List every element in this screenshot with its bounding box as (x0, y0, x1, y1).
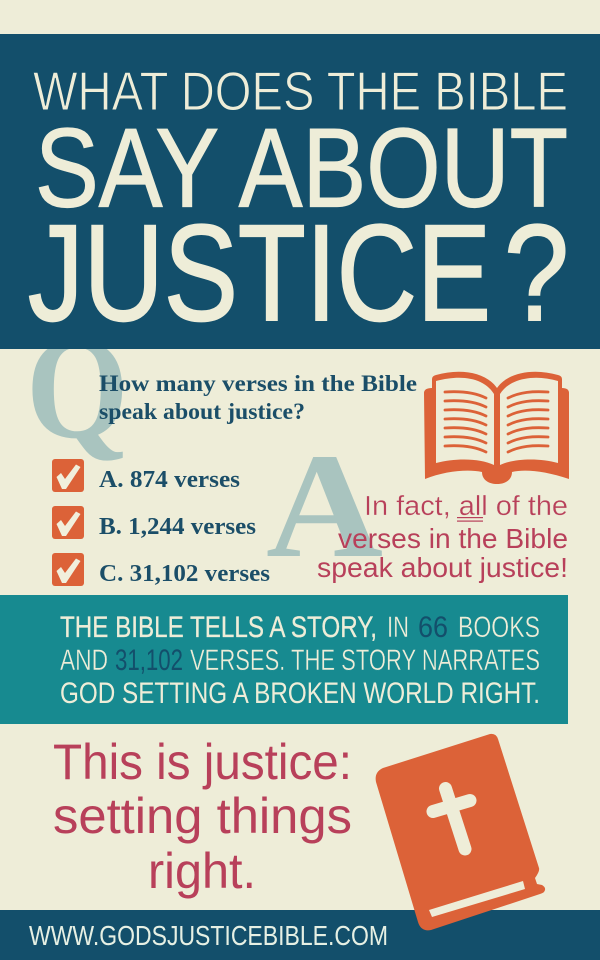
story line 2 (60, 644, 540, 677)
letter Q watermark: Q (26, 308, 129, 470)
story banner (0, 595, 568, 724)
justice statement: setting things (53, 788, 352, 844)
story line 1: 66 (418, 611, 448, 644)
title banner (0, 34, 600, 350)
story line 2: AND (60, 644, 108, 677)
icon: open book (424, 372, 569, 484)
question text (99, 371, 417, 424)
icon: closed bible with cross (376, 734, 545, 930)
answer text: In fact, all of the (364, 490, 568, 521)
title: question mark: ? (504, 197, 569, 350)
answer option B: B. 1,244 verses (99, 514, 256, 540)
answer text: verses in the Bible (338, 523, 568, 554)
question text: speak about justice? (99, 399, 305, 424)
answer text: speak about justice! (317, 552, 568, 583)
answer option A: A. 874 verses (99, 467, 240, 493)
answer option C (52, 553, 270, 587)
story line 1: THE BIBLE TELLS A STORY, (60, 611, 377, 644)
story line 1: BOOKS (458, 611, 540, 644)
footer bar (0, 910, 600, 960)
justice statement: This is justice: (53, 734, 352, 790)
footer url: WWW.GODSJUSTICEBIBLE.COM (29, 920, 388, 951)
answer option C: C. 31,102 verses (99, 561, 270, 587)
story line 1: IN (387, 611, 409, 644)
answer option A (52, 459, 240, 493)
justice statement (53, 734, 352, 899)
question text: How many verses in the Bible (99, 371, 417, 396)
story line 2: 31,102 (115, 644, 183, 677)
letter A watermark: A (266, 423, 383, 589)
answer text (317, 490, 568, 583)
answer option B (52, 506, 256, 540)
justice statement: right. (148, 843, 256, 899)
title: line 3: JUSTICE (28, 197, 491, 350)
